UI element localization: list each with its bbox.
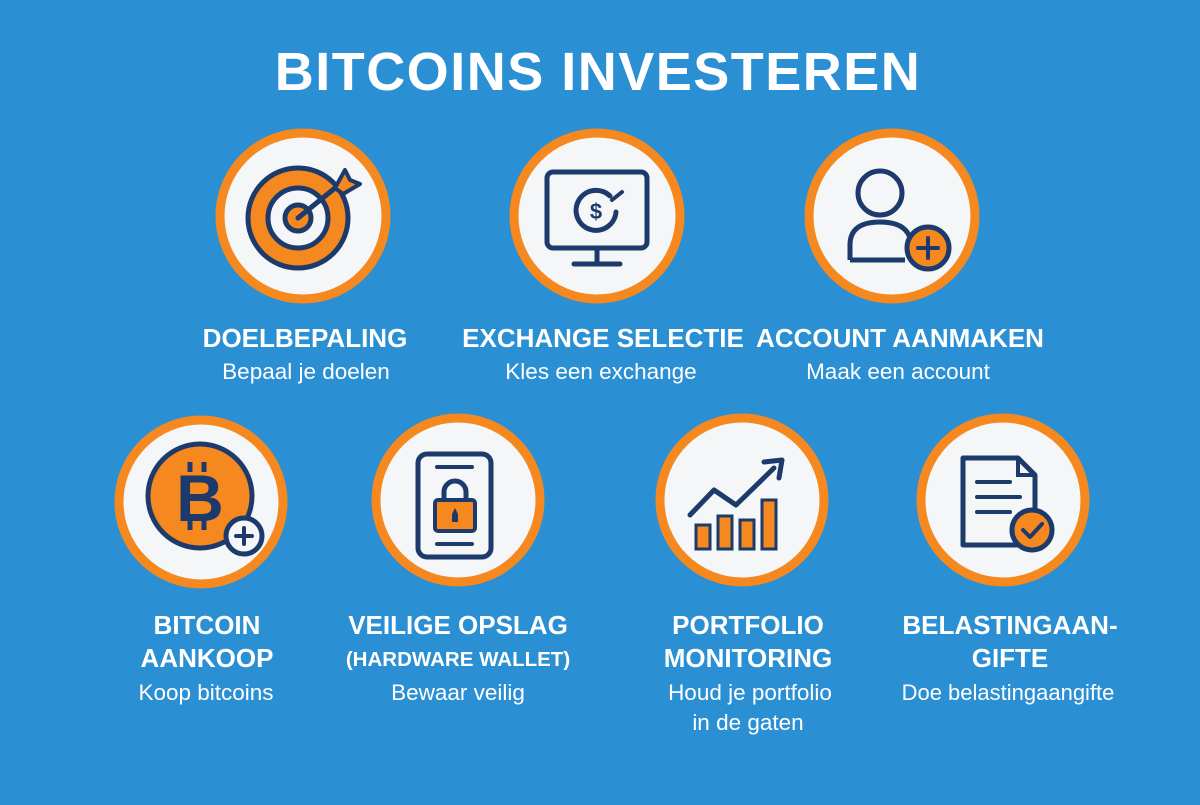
step 6: portfolio monitoring: MONITORING — [664, 643, 832, 673]
step 3: account aanmaken — [756, 133, 1044, 384]
heading: EXCHANGE SELECTIE — [462, 323, 744, 353]
step 6: portfolio monitoring — [660, 418, 832, 735]
step 5: veilige opslag — [346, 418, 570, 705]
icon: user plus — [809, 133, 975, 299]
icon: monitor with dollar: $ — [590, 199, 602, 224]
heading: BELASTINGAAN- — [902, 610, 1118, 640]
heading: DOELBEPALING — [203, 323, 407, 353]
heading: ACCOUNT AANMAKEN — [756, 323, 1044, 353]
icon: bitcoin plus: B — [176, 461, 224, 535]
step 7: belastingaangifte: GIFTE — [972, 643, 1048, 673]
step 6: portfolio monitoring: in de gaten — [692, 710, 804, 735]
step 2: exchange selectie — [462, 133, 744, 384]
icon: monitor with dollar — [514, 133, 680, 299]
step 4: bitcoin aankoop — [119, 420, 283, 705]
icon: bar chart up — [660, 418, 824, 582]
icon: document check — [921, 418, 1085, 582]
description: Kles een exchange — [505, 359, 697, 384]
heading: BITCOIN — [154, 610, 260, 640]
heading: VEILIGE OPSLAG — [348, 610, 568, 640]
icon: target — [220, 133, 386, 299]
description: Maak een account — [806, 359, 991, 384]
icon: hardware wallet with lock — [376, 418, 540, 582]
description: Houd je portfolio — [668, 680, 832, 705]
step 1: doelbepaling — [203, 133, 407, 384]
description: Bewaar veilig — [391, 680, 525, 705]
description: Bepaal je doelen — [222, 359, 390, 384]
step 7: belastingaangifte — [902, 418, 1118, 705]
step 4: bitcoin aankoop: AANKOOP — [141, 643, 273, 673]
description: Doe belastingaangifte — [902, 680, 1114, 705]
title: BITCOINS INVESTEREN — [275, 42, 921, 102]
heading: PORTFOLIO — [672, 610, 824, 640]
step 5: veilige opslag: (HARDWARE WALLET) — [346, 648, 570, 671]
icon: bitcoin plus — [119, 420, 283, 584]
description: Koop bitcoins — [138, 680, 274, 705]
